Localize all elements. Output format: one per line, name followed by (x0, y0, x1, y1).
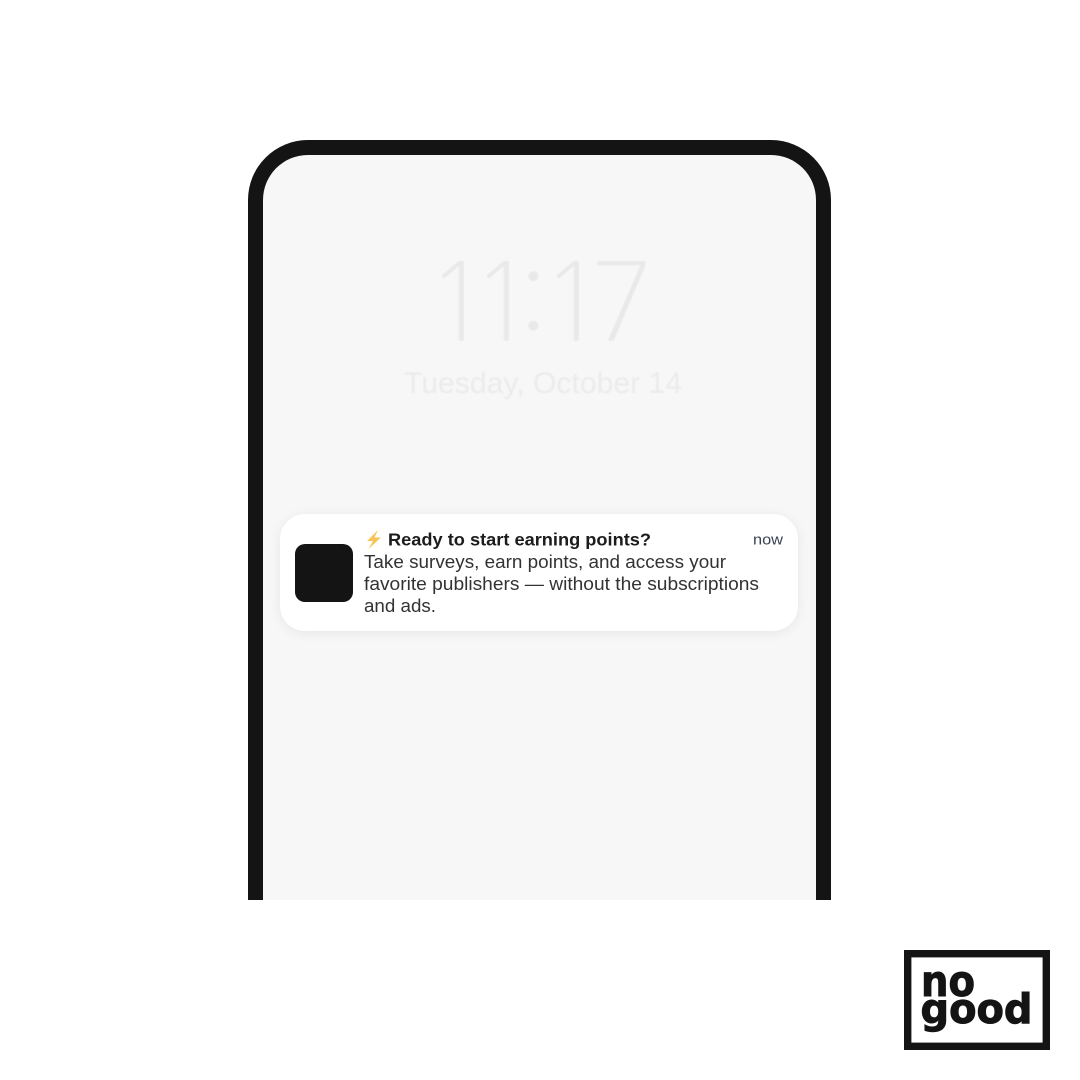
notification text (364, 530, 783, 616)
time: 11:17 (424, 248, 655, 358)
phone frame (248, 140, 831, 900)
timestamp: now (753, 532, 783, 548)
icon: lightning bolt (367, 530, 381, 549)
notification body line 2: favorite publishers — without the subscriptions (364, 573, 759, 594)
logo word: no: no (921, 957, 975, 1007)
notification card (280, 514, 798, 631)
NoGood logo (904, 950, 1050, 1050)
lock screen clock (404, 248, 682, 400)
notification body line 1: Take surveys, earn points, and access your (364, 551, 726, 572)
notification title: Ready to start earning points? (388, 530, 651, 550)
notification body line 3: and ads. (364, 595, 436, 616)
logo word: good: good (920, 985, 1032, 1033)
date: Tuesday, October 14 (404, 367, 682, 400)
app icon (295, 544, 353, 602)
